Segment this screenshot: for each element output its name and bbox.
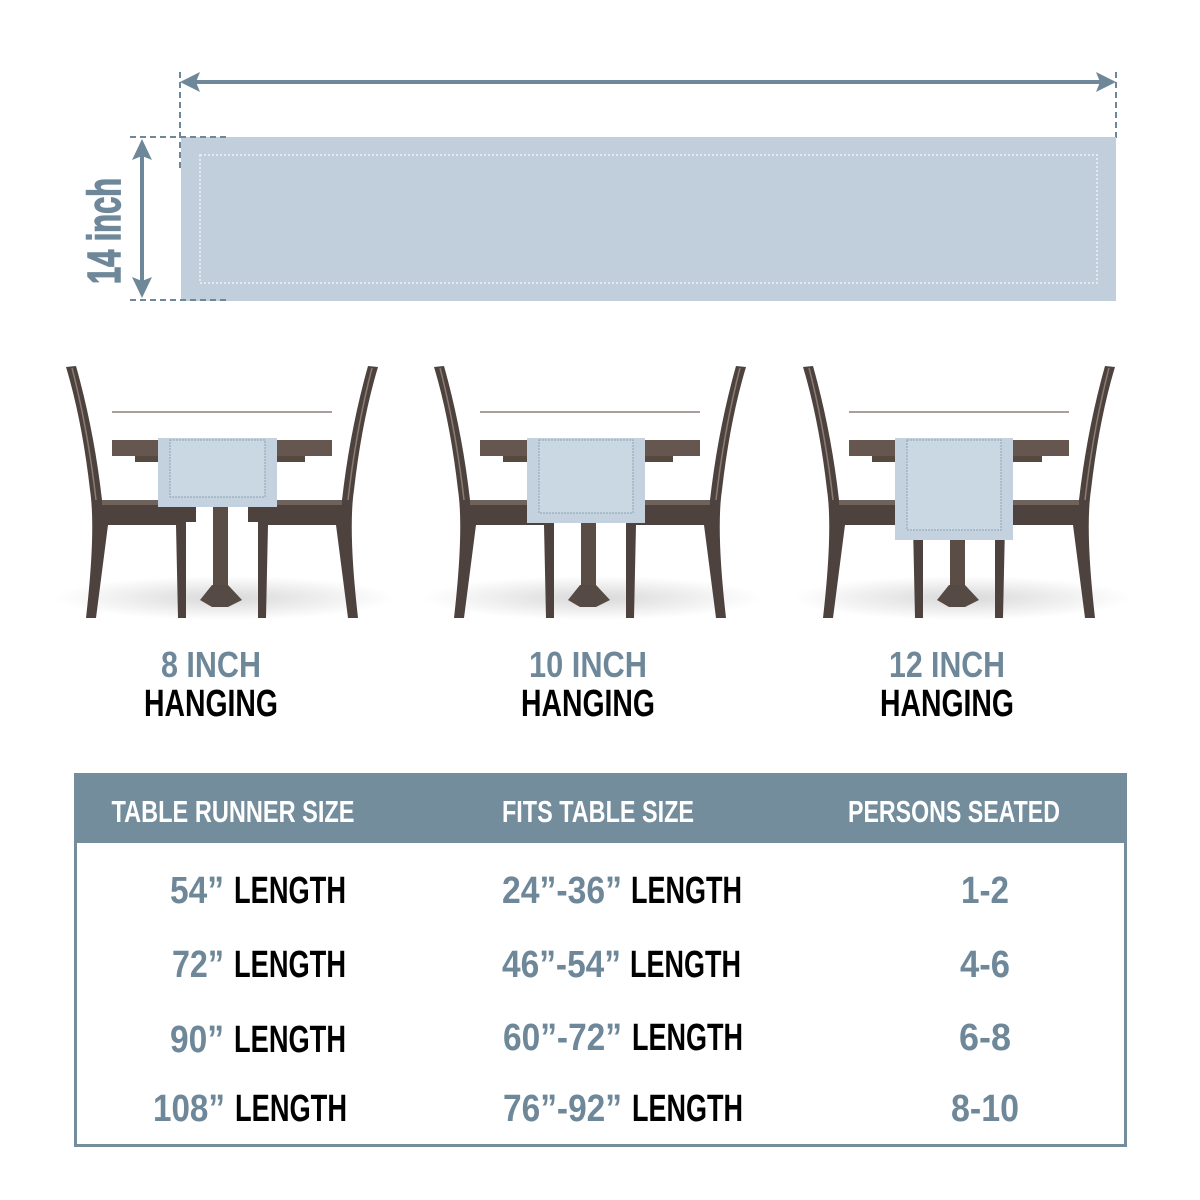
scene: 10 inch hanging — [423, 366, 763, 620]
table rows: LENGTH — [630, 944, 741, 986]
hanging labels: HANGING — [880, 683, 1014, 725]
hanging labels: HANGING — [144, 683, 278, 725]
table rows: 4-6 — [960, 944, 1010, 986]
table rows: LENGTH — [632, 1088, 743, 1130]
table rows: LENGTH — [631, 870, 742, 912]
table rows: 108” — [153, 1088, 225, 1130]
scene: 8 inch hanging — [55, 366, 395, 620]
size table: TABLE RUNNER SIZE — [112, 794, 354, 829]
table rows: LENGTH — [234, 944, 346, 986]
table rows: 24”-36” — [502, 870, 622, 912]
table rows: 8-10 — [951, 1088, 1019, 1130]
table rows: 72” — [172, 944, 224, 986]
hanging labels: 12 INCH — [889, 644, 1005, 685]
hanging labels — [144, 644, 1014, 725]
hanging labels: 8 INCH — [161, 644, 261, 685]
table rows: LENGTH — [632, 1017, 743, 1059]
scene: 12 inch hanging — [792, 366, 1132, 620]
table rows: 54” — [170, 870, 224, 912]
size table — [74, 773, 1127, 1146]
runner dimension diagram — [78, 72, 1116, 301]
runner top view — [181, 137, 1116, 301]
hanging labels: 10 INCH — [529, 644, 647, 685]
width arrow — [130, 137, 230, 300]
table header — [74, 773, 1127, 843]
size table: PERSONS SEATED — [848, 794, 1060, 829]
table rows: 1-2 — [961, 870, 1009, 912]
table rows: 90” — [170, 1019, 224, 1061]
table rows: LENGTH — [235, 1088, 347, 1130]
table rows: 46”-54” — [502, 944, 621, 986]
label: 14 inch: 14 inch — [78, 178, 130, 284]
table rows: LENGTH — [234, 1019, 346, 1061]
table rows: 76”-92” — [503, 1088, 622, 1130]
hanging labels: HANGING — [521, 683, 655, 725]
table rows: 6-8 — [959, 1017, 1011, 1059]
table rows: LENGTH — [234, 870, 346, 912]
length arrow — [180, 72, 1116, 172]
size table: FITS TABLE SIZE — [502, 794, 694, 829]
table rows: 60”-72” — [503, 1017, 622, 1059]
table rows — [153, 870, 1019, 1130]
